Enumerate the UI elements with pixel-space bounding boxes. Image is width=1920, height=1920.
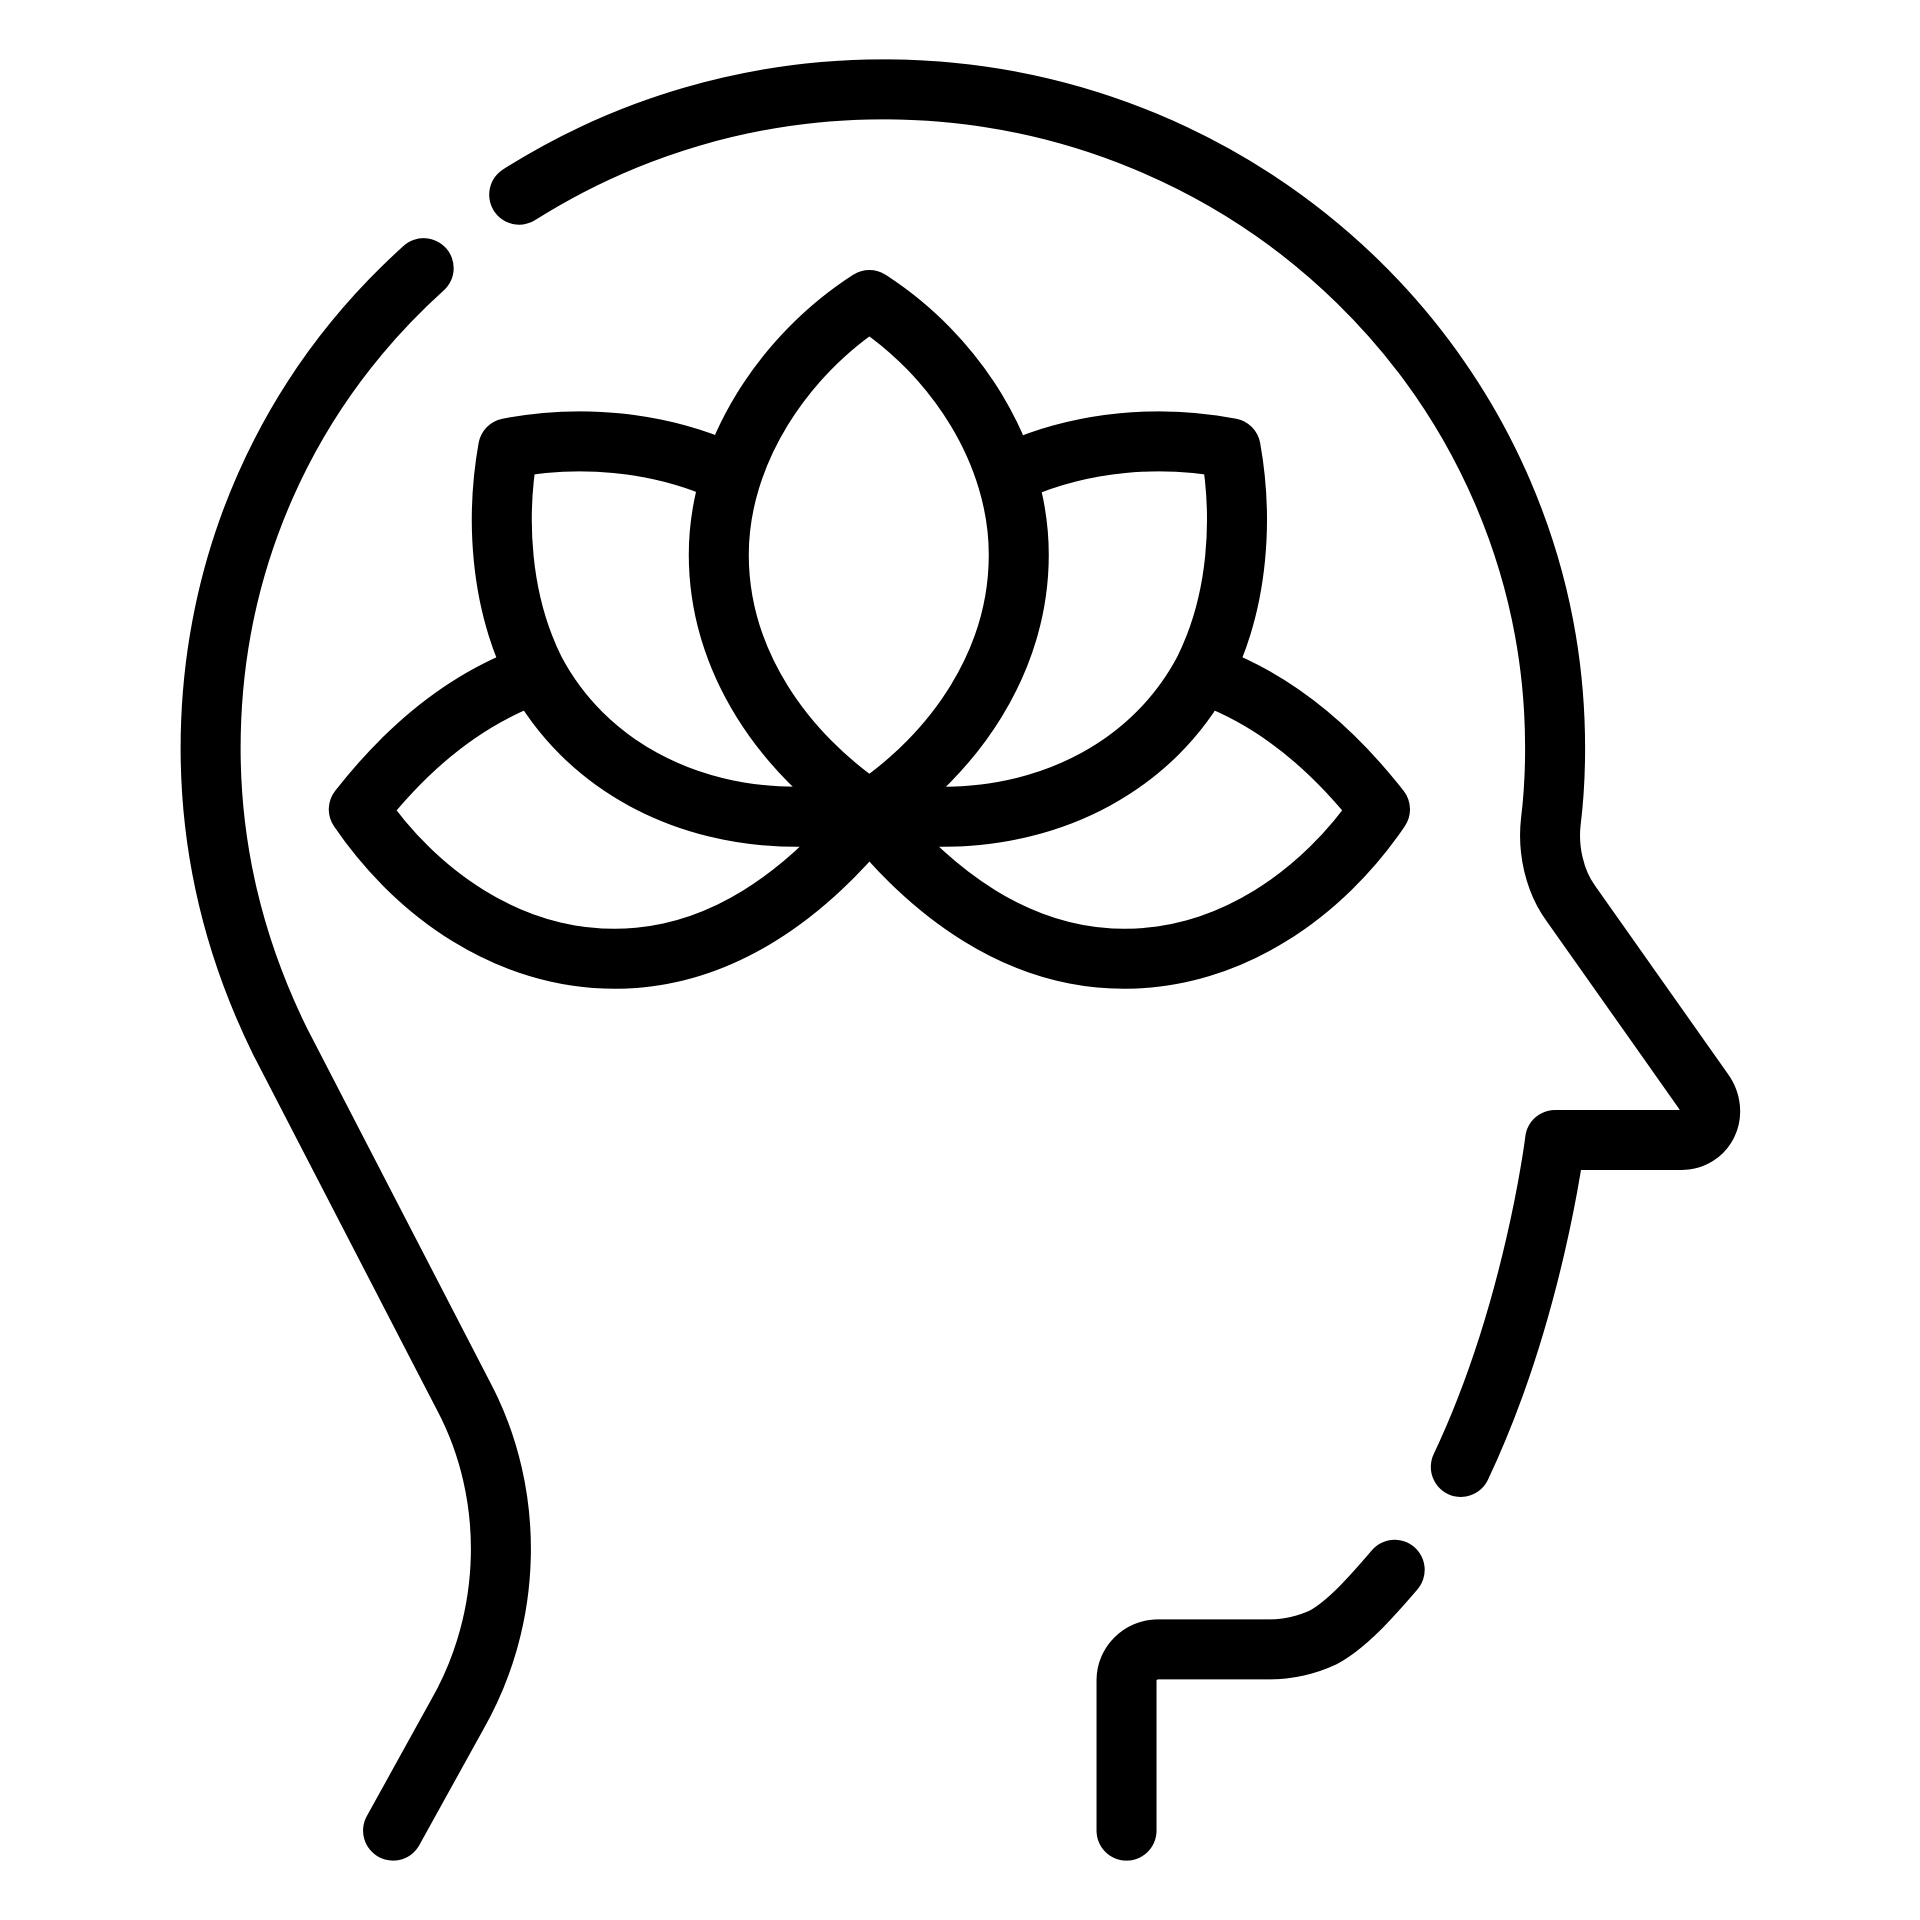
upper left petal: [502, 441, 869, 817]
lower right petal: [869, 677, 1380, 959]
upper right petal: [869, 441, 1237, 817]
chin and throat stroke: [1127, 1570, 1395, 1831]
centre petal: [719, 300, 1019, 811]
back of head and neck stroke: [211, 268, 501, 1831]
head outline: [211, 89, 1710, 1831]
lower left petal: [359, 677, 869, 959]
crown, forehead, nose and jaw stroke: [519, 89, 1710, 1467]
icon: lotus flower: [359, 300, 1380, 959]
